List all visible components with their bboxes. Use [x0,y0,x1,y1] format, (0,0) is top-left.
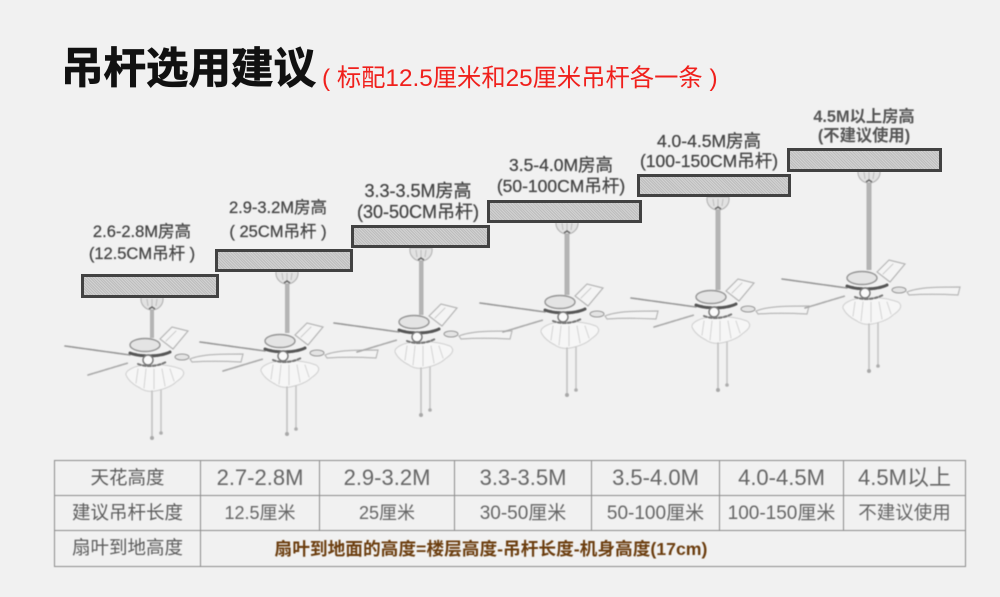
ceiling block 6 [787,148,942,172]
label 3: 3.3-3.5M房高 [364,181,472,201]
specification table: 30-50厘米 [480,502,566,524]
label 5: 4.0-4.5M房高 [657,131,761,151]
fan 1 [65,297,243,440]
fan 4 [480,221,658,397]
specification table: 4.5M以上 [858,465,951,490]
label 6: (不建议使用) [818,127,910,145]
ceiling block 5 [637,174,791,197]
label 2 [228,198,327,242]
specification table: 建议吊杆长度 [72,502,183,523]
label 4: (50-100CM吊杆) [497,176,625,196]
specification table [54,460,966,568]
fan 3 [334,248,512,417]
specification table: 3.3-3.5M [480,465,566,490]
label 2: ( 25CM吊杆 ) [229,223,327,241]
label 3 [357,180,479,223]
specification table: 扇叶到地面的高度=楼层高度-吊杆长度-机身高度(17cm) [275,539,707,559]
specification table: 12.5厘米 [224,503,296,523]
specification table: 扇叶到地高度 [72,537,183,558]
specification table: 不建议使用 [858,502,951,523]
ceiling block 3 [351,225,490,248]
fan 6 [782,170,960,373]
label 6: 4.5M以上房高 [813,108,915,126]
fan 2 [200,271,378,436]
ceiling block 1 [81,274,219,298]
fan 5 [631,197,809,392]
label 5 [640,131,778,172]
specification table: 50-100厘米 [607,502,704,524]
label 1: 2.6-2.8M房高 [93,223,191,241]
specification table: 4.0-4.5M [738,465,825,490]
title: 吊杆选用建议 [61,46,316,93]
subtitle: ( 标配12.5厘米和25厘米吊杆各一条 ) [322,65,718,92]
label 2: 2.9-3.2M房高 [229,199,327,217]
label 5: (100-150CM吊杆) [640,151,778,171]
label 4: 3.5-4.0M房高 [509,155,613,175]
label 1 [89,222,195,264]
label 1: (12.5CM吊杆 ) [89,245,195,263]
specification table: 天花高度 [90,467,164,488]
specification table: 100-150厘米 [728,502,835,524]
label 3: (30-50CM吊杆) [357,202,479,222]
ceiling block 4 [487,200,642,223]
specification table: 2.9-3.2M [344,465,430,490]
label 6 [812,107,915,146]
specification table: 3.5-4.0M [612,465,699,490]
specification table: 25厘米 [359,503,415,523]
label 4 [497,155,625,196]
specification table: 2.7-2.8M [217,465,303,490]
ceiling block 2 [215,249,353,272]
